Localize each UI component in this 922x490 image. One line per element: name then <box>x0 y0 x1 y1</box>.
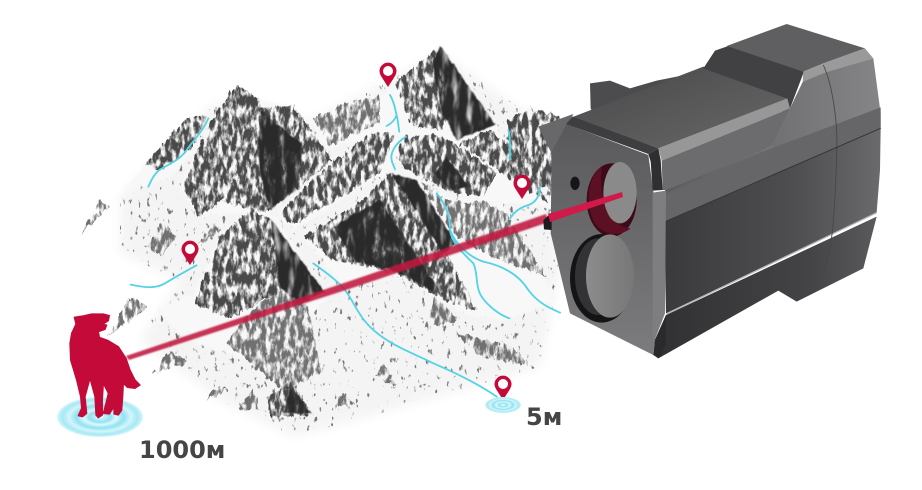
side band <box>665 107 881 222</box>
stepped slope <box>703 46 804 147</box>
label: far distance: 1000м <box>139 436 225 464</box>
lower lens <box>570 234 634 323</box>
lower side <box>664 128 881 313</box>
laser in device <box>548 192 623 222</box>
snow shading <box>120 53 560 437</box>
pin: left <box>181 241 198 265</box>
corner <box>648 148 663 191</box>
ridge: middle <box>277 132 410 230</box>
rangefinder device <box>538 24 881 358</box>
peak: tall central <box>310 44 513 167</box>
sensor dot <box>570 177 580 190</box>
mount bracket <box>590 70 703 120</box>
side notch <box>543 213 552 230</box>
peak: central front <box>303 172 557 320</box>
wolf silhouette <box>70 314 140 418</box>
rock speckle <box>120 53 560 437</box>
upper side <box>665 58 881 222</box>
ripple under wolf <box>57 397 143 437</box>
seam <box>821 65 837 282</box>
left shoulder <box>538 114 573 153</box>
pin: top <box>380 63 396 87</box>
rear highlight <box>803 48 873 83</box>
base corner <box>653 315 666 358</box>
upper lens <box>587 162 637 237</box>
laser beam <box>126 214 549 360</box>
lower top panel <box>662 108 790 190</box>
wolf target <box>57 314 143 437</box>
rear top <box>727 24 865 72</box>
top surface <box>572 67 788 148</box>
front right edge <box>653 191 666 355</box>
small outcrops <box>82 200 528 417</box>
peak: far right <box>507 108 560 197</box>
peak: far left spur <box>123 114 207 192</box>
white stripe <box>667 213 877 314</box>
front strip highlight <box>658 98 790 161</box>
peak: middle right <box>393 129 550 207</box>
divider line <box>665 128 881 222</box>
peak: large left <box>180 85 333 217</box>
mountain range <box>82 44 560 437</box>
bottom band <box>654 217 877 358</box>
label: near distance: 5м <box>526 403 562 431</box>
pin: near point <box>494 376 511 400</box>
front chamfer <box>566 117 658 154</box>
pin: right <box>514 175 530 199</box>
peak: front left <box>157 207 327 390</box>
front face <box>551 124 655 355</box>
cyan trails <box>131 95 560 397</box>
map pins <box>181 63 530 400</box>
ripple under near pin <box>485 397 521 413</box>
